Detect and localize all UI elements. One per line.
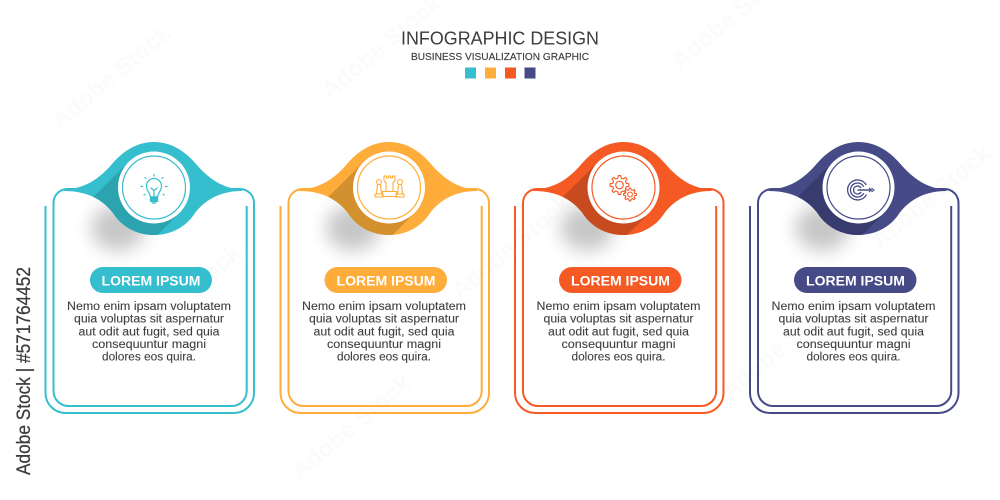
colour legend squares [465, 68, 536, 78]
teardrop badge [534, 142, 712, 235]
watermark: Adobe Stock [117, 239, 247, 355]
label pill [90, 267, 212, 293]
soft shadow [326, 205, 380, 251]
white disc [118, 152, 190, 224]
soft shadow [796, 205, 850, 251]
long shadow [94, 163, 180, 235]
panel: card 4 navy [750, 142, 958, 413]
body text: aut odit aut fugit, sed quia [783, 326, 925, 338]
body text: aut odit aut fugit, sed quia [314, 326, 455, 338]
panel: card 3 red [515, 142, 724, 413]
watermark: Adobe Stock [447, 189, 577, 305]
body text: Nemo enim ipsam voluptatem [302, 301, 466, 313]
body text: consequuntur magni [92, 339, 206, 351]
teardrop badge [64, 142, 242, 235]
long shadow [563, 162, 649, 235]
body text: quia voluptas sit aspernatur [309, 314, 459, 326]
body text: Nemo enim ipsam voluptatem [772, 301, 935, 313]
body text: quia voluptas sit aspernatur [544, 314, 694, 326]
stock id side label: Adobe Stock | #571764452 [14, 267, 35, 475]
icon: target [848, 180, 874, 200]
inner ring [122, 156, 186, 219]
label pill [794, 267, 916, 293]
teardrop badge [768, 142, 946, 235]
body text [67, 301, 231, 364]
panel: card 2 orange [280, 142, 489, 413]
body text: Nemo enim ipsam voluptatem [67, 301, 231, 313]
card outline [750, 189, 958, 413]
body text: dolores eos quira. [806, 352, 900, 364]
watermark: Adobe Stock [47, 19, 177, 135]
body text: aut odit aut fugit, sed quia [548, 326, 690, 338]
icon: chess pieces [375, 176, 404, 197]
long shadow [798, 162, 884, 235]
watermark: Adobe Stock [717, 289, 847, 405]
pill text: LOREM IPSUM [571, 274, 670, 288]
card outline [280, 189, 489, 413]
body text: consequuntur magni [327, 339, 441, 351]
pill text: LOREM IPSUM [102, 274, 200, 288]
label pill [324, 267, 447, 293]
card outline [46, 189, 254, 413]
white disc [588, 152, 660, 224]
body text [772, 301, 936, 364]
icon: light bulb [141, 174, 167, 203]
inner ring [592, 156, 655, 219]
body text: quia voluptas sit aspernatur [778, 314, 929, 326]
long shadow [328, 162, 414, 235]
icon: gears [610, 176, 636, 201]
inner ring [358, 156, 420, 219]
body text: aut odit aut fugit, sed quia [78, 326, 220, 338]
inner ring [827, 156, 890, 219]
teardrop badge [299, 142, 477, 235]
white disc [822, 152, 894, 224]
body text: consequuntur magni [562, 339, 676, 351]
label pill [559, 267, 682, 293]
pill text: LOREM IPSUM [806, 274, 905, 288]
watermark: Adobe Stock [867, 139, 997, 255]
body text: Nemo enim ipsam voluptatem [536, 301, 700, 313]
panel: card 1 teal [46, 142, 254, 413]
white disc [353, 152, 425, 224]
watermark: Adobe Stock [287, 369, 417, 485]
title: INFOGRAPHIC DESIGN [401, 28, 599, 48]
body text: dolores eos quira. [572, 352, 666, 364]
soft shadow [91, 205, 145, 251]
body text: consequuntur magni [796, 339, 910, 351]
body text: dolores eos quira. [337, 352, 431, 364]
soft shadow [560, 205, 614, 251]
body text [536, 301, 700, 364]
body text: quia voluptas sit aspernatur [74, 314, 224, 326]
body text: dolores eos quira. [102, 352, 196, 364]
subtitle: BUSINESS VISUALIZATION GRAPHIC [411, 51, 589, 63]
card outline [515, 189, 724, 413]
body text [302, 301, 466, 364]
pill text: LOREM IPSUM [336, 274, 436, 288]
